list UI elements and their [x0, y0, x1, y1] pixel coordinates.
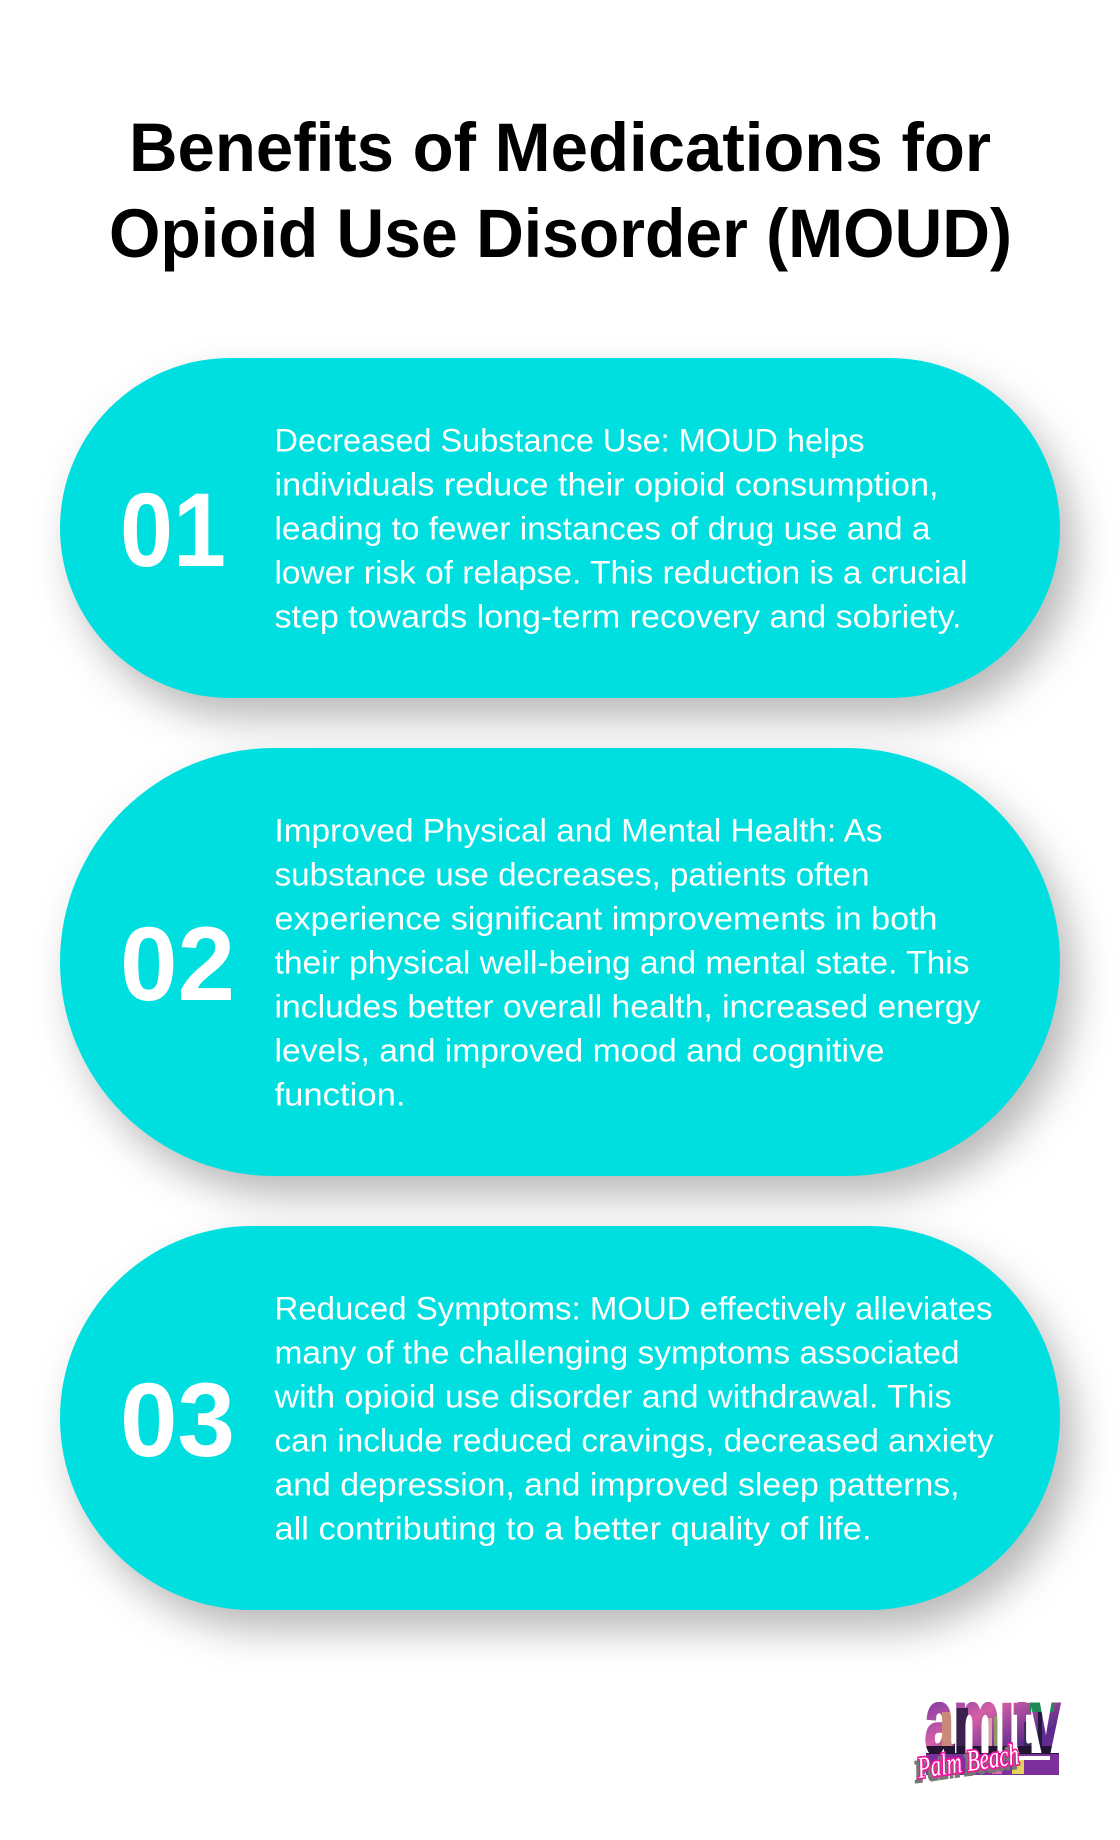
title: Benefits of Medications for	[129, 109, 991, 186]
body text: their physical well-being and mental state. This	[274, 944, 970, 980]
body text: lower risk of relapse. This reduction is a crucial	[274, 554, 968, 590]
body text: function.	[274, 1076, 406, 1112]
body text: Decreased Substance Use: MOUD helps	[274, 422, 864, 458]
panel: decreased substance use	[60, 358, 1060, 698]
pill background	[60, 1226, 1060, 1610]
body text: Reduced Symptoms: MOUD effectively alleviates	[274, 1290, 992, 1326]
logo: amity palm beach	[914, 1702, 1062, 1784]
logo script shadow: Palm Beach	[912, 1742, 1018, 1789]
body text	[274, 422, 968, 634]
body text: with opioid use disorder and withdrawal. This	[273, 1378, 952, 1414]
logo white bar	[1017, 1756, 1050, 1760]
body text	[273, 1290, 994, 1546]
number 02: 02	[120, 906, 235, 1023]
number 01: 01	[120, 472, 226, 589]
title	[109, 109, 1012, 272]
body text: many of the challenging symptoms associated	[274, 1334, 960, 1370]
body text: individuals reduce their opioid consumption,	[274, 466, 938, 502]
number 03: 03	[120, 1362, 235, 1479]
body text: includes better overall health, increased energy	[274, 988, 980, 1024]
pill background	[60, 748, 1060, 1176]
body text: and depression, and improved sleep patterns,	[274, 1466, 959, 1502]
body text: levels, and improved mood and cognitive	[274, 1032, 885, 1068]
body text: leading to fewer instances of drug use and a	[274, 510, 931, 546]
title: Opioid Use Disorder (MOUD)	[109, 195, 1012, 272]
panel: improved physical and mental health	[60, 748, 1060, 1176]
logo script: Palm Beach	[915, 1738, 1021, 1785]
body text: step towards long-term recovery and sobriety.	[274, 598, 962, 634]
pill background	[60, 358, 1060, 698]
logo city strip	[926, 1753, 1059, 1775]
body text: experience significant improvements in both	[274, 900, 938, 936]
body text: can include reduced cravings, decreased anxiety	[274, 1422, 994, 1458]
body text	[274, 812, 980, 1112]
body text: substance use decreases, patients often	[274, 856, 870, 892]
body text: Improved Physical and Mental Health: As	[274, 812, 883, 848]
panel: reduced symptoms	[60, 1226, 1060, 1610]
body text: all contributing to a better quality of life.	[274, 1510, 872, 1546]
